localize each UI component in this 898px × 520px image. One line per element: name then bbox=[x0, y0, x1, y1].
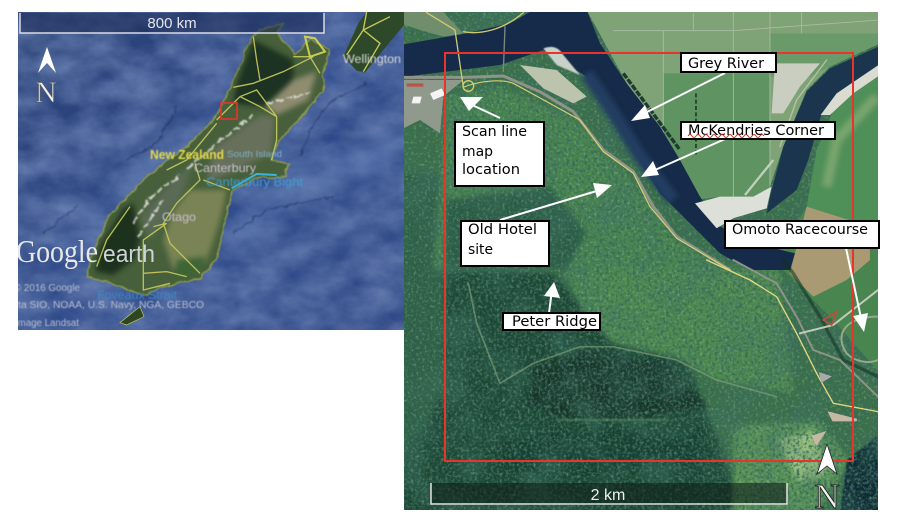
place labels: South Island bbox=[227, 149, 282, 160]
arrow: Omoto Racecourse bbox=[846, 248, 868, 332]
label: Old Hotel site: Old Hotel bbox=[468, 222, 537, 238]
place labels: Otago bbox=[162, 210, 196, 224]
Grey River channels and gravel bars bbox=[400, 10, 880, 270]
Google earth logo: earth bbox=[103, 241, 155, 268]
place labels: Data SIO, NOAA, U.S. Navy, NGA, GEBCO bbox=[5, 300, 204, 311]
label: McKendries Corner: McKendries Corner bbox=[688, 123, 824, 139]
arrow: Scan line map location bbox=[460, 97, 500, 118]
north arrow bbox=[814, 444, 840, 516]
scale bar: 800 km bbox=[20, 13, 324, 33]
scale bar: 2 km: 2 km bbox=[591, 487, 625, 504]
scale bar: 800 km: 800 km bbox=[147, 15, 197, 32]
place labels: Canterbury bbox=[194, 161, 256, 175]
arrow: Peter Ridge bbox=[544, 282, 560, 313]
label: Scan line map location: Scan line bbox=[462, 124, 527, 140]
label: Omoto Racecourse: Omoto Racecourse bbox=[732, 222, 868, 238]
study area red boundary bbox=[445, 53, 853, 461]
north arrow: N bbox=[814, 477, 840, 516]
place labels: Wellington bbox=[343, 54, 401, 66]
ocean background bbox=[18, 12, 404, 330]
north arrow bbox=[36, 47, 56, 102]
arrow: Old Hotel site bbox=[500, 183, 612, 220]
label: Scan line map location bbox=[455, 122, 544, 186]
place labels: © 2016 Google bbox=[14, 283, 80, 294]
scale bar: 2 km bbox=[431, 483, 787, 504]
tree canopy texture bbox=[404, 12, 878, 510]
roads bbox=[403, 13, 827, 270]
place labels bbox=[5, 54, 401, 329]
label: Grey River: Grey River bbox=[688, 56, 764, 72]
place labels: New Zealand bbox=[150, 148, 224, 162]
arrow: McKendries Corner bbox=[641, 139, 725, 177]
place labels: Foveaux Strait bbox=[97, 290, 178, 302]
label: Old Hotel site: site bbox=[468, 242, 493, 258]
farmland bbox=[587, 10, 880, 373]
panel: New Zealand South Island overview map bbox=[5, 12, 404, 330]
label: Old Hotel site bbox=[461, 221, 549, 266]
place labels: Canterbury Bight bbox=[206, 175, 304, 189]
label: Peter Ridge: Peter Ridge bbox=[512, 314, 597, 330]
North Island tip bbox=[343, 12, 404, 73]
arrow: Grey River bbox=[631, 73, 725, 121]
panel: Grey River aerial photo bbox=[400, 10, 880, 520]
Google earth logo: Google bbox=[16, 233, 98, 269]
town at top left bbox=[400, 12, 463, 133]
north arrow: N bbox=[35, 76, 57, 109]
South Island landmass bbox=[87, 24, 329, 325]
Google earth logo bbox=[18, 240, 154, 269]
label: Omoto Racecourse bbox=[725, 221, 879, 248]
forest base bbox=[400, 12, 880, 520]
label: Scan line map location: location bbox=[462, 162, 520, 178]
label: Scan line map location: map bbox=[462, 144, 493, 160]
label: Grey River bbox=[681, 53, 776, 72]
study area marker bbox=[221, 103, 237, 119]
place labels: Image Landsat bbox=[15, 318, 79, 329]
